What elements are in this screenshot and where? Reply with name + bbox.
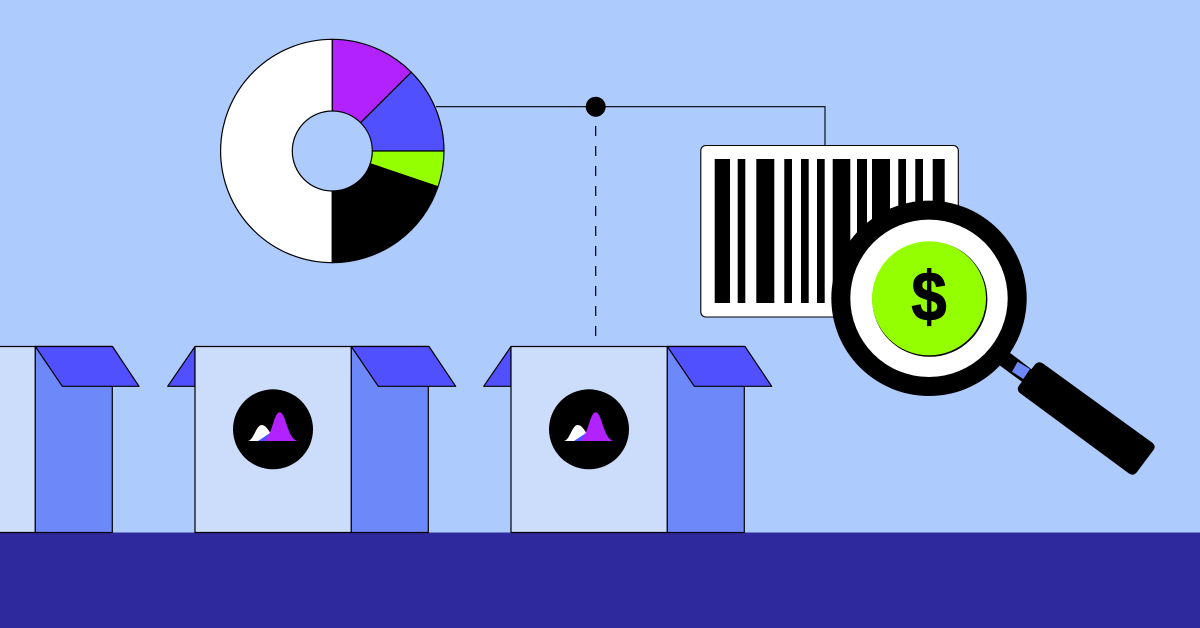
left flap [484,346,511,386]
neck highlight [1012,362,1030,379]
barcode label [701,146,958,317]
purple curve [265,412,297,441]
slice: blue [361,72,444,151]
box 3 [484,346,772,532]
donut chart [221,39,444,263]
label card [701,146,958,317]
right flap [351,346,456,386]
slice: green [370,151,444,187]
connector dot [586,97,606,117]
slice: black [332,164,438,263]
badge circle [233,389,313,469]
box front [195,346,351,532]
handle grip [1018,362,1155,475]
blue overlap [574,433,593,441]
white curve [564,425,588,441]
box 1 (cropped at left edge) [0,346,139,532]
box 2 [168,346,456,532]
box side [667,346,744,532]
connector: dashed line down to box [595,126,597,336]
box front [511,346,667,532]
barcode bars [715,159,945,303]
badge circle [549,389,629,469]
blue overlap [258,433,277,441]
logo badge [549,389,629,469]
connector: solid line from chart to barcode [436,107,825,146]
coin [872,241,986,355]
coin shadow [872,242,987,357]
box side [351,346,428,532]
lens rim [831,201,1027,396]
box front [0,346,35,532]
right flap [667,346,772,386]
left flap [168,346,195,386]
handle neck [995,349,1035,384]
dollar sign: $ [911,258,947,336]
box flap [35,346,139,386]
purple curve [581,412,613,441]
magnifying glass [831,201,1155,475]
slice: white [221,39,332,263]
slice: purple [332,39,411,123]
lens glass [850,220,1008,377]
logo badge [233,389,313,469]
white curve [248,425,272,441]
ground band [0,532,1200,628]
box side [35,346,112,532]
